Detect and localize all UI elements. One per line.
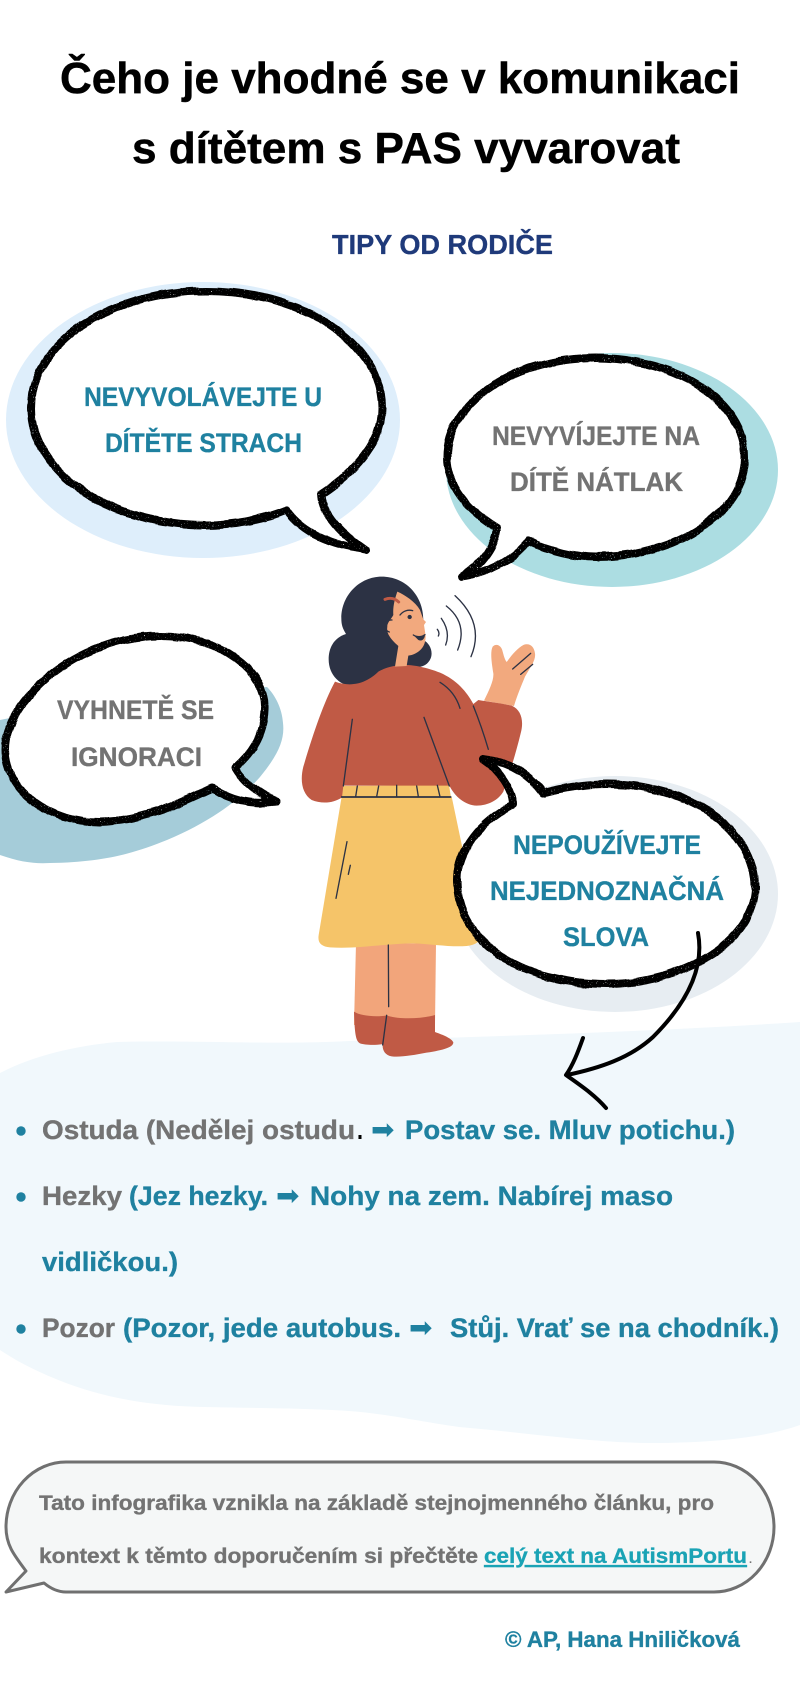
wave panel: [0, 1022, 800, 1443]
speech bubble: ambiguous words: [457, 759, 755, 984]
subtitle: TIPY OD RODIČE: [332, 228, 553, 260]
skirt: [318, 797, 481, 948]
item: Pozor: Pozor: [42, 1313, 115, 1343]
speech bubble: pressure: DÍTĚ NÁTLAK: [510, 466, 683, 497]
footer note bubble: celý text na AutismPortu: [484, 1545, 747, 1568]
sweater: [302, 665, 522, 806]
eye: [407, 615, 412, 619]
item: Pozor: (Pozor, jede autobus.: [123, 1313, 401, 1343]
speech bubble: ambiguous words: NEPOUŽÍVEJTE: [513, 829, 701, 860]
item: Hezky: (Jez hezky.: [129, 1181, 268, 1211]
speech bubble: fear: NEVYVOLÁVEJTE U: [84, 381, 322, 412]
item: Hezky: [16, 1179, 673, 1277]
item: Pozor: [16, 1311, 779, 1344]
speech bubble: pressure: NEVYVÍJEJTE NA: [492, 420, 700, 451]
speech bubble: pressure: [447, 358, 745, 577]
item: Pozor: Stůj. Vrať se na chodník.): [450, 1313, 779, 1343]
title: [60, 52, 740, 173]
hair clip: [385, 598, 399, 602]
bullet list: [16, 1113, 779, 1344]
mouth: [413, 635, 425, 641]
footer note bubble: [6, 1462, 774, 1592]
item: Ostuda: Ostuda (Nedělej ostudu: [42, 1115, 355, 1145]
item: Ostuda: [16, 1113, 735, 1146]
item: Hezky: vidličkou.): [42, 1247, 178, 1277]
speech bubble: fear: DÍTĚTE STRACH: [105, 427, 302, 458]
item: Pozor: ➡: [409, 1311, 432, 1344]
title: s dítětem s PAS vyvarovat: [132, 124, 680, 173]
item: Hezky: Hezky: [42, 1181, 122, 1211]
arrow to examples: [566, 933, 699, 1108]
speech bubble: ignoring: [5, 636, 277, 822]
face and clothing lines: [336, 596, 533, 1045]
speech bubble: ignoring: IGNORACI: [71, 742, 202, 772]
legs: [354, 943, 436, 1025]
right boot: [383, 1015, 453, 1057]
speech bubble: ambiguous words: NEJEDNOZNAČNÁ: [490, 875, 724, 906]
waistband: [342, 785, 451, 797]
footer note bubble: kontext k těmto doporučením si přečtěte: [39, 1545, 478, 1568]
footer note bubble: .: [749, 1554, 752, 1566]
item: Ostuda: ➡: [371, 1113, 394, 1146]
item: Hezky: Nohy na zem. Nabírej maso: [310, 1181, 673, 1211]
left boot: [354, 1012, 387, 1045]
blob: teal: [446, 353, 778, 587]
face: [387, 592, 426, 667]
copyright credit: © AP, Hana Hniličková: [505, 1627, 741, 1652]
footer note bubble: Tato infografika vznikla na základě stejnojmenného článku, pro: [39, 1492, 714, 1515]
illustration: woman speaking: [302, 577, 535, 1057]
speech bubble: ignoring: VYHNETĚ SE: [57, 694, 214, 725]
blob: pale grey: [452, 776, 778, 1012]
title: Čeho je vhodné se v komunikaci: [60, 52, 740, 103]
item: Ostuda: Postav se. Mluv potichu.): [405, 1115, 735, 1145]
hand: [484, 644, 535, 706]
item: Ostuda: .: [357, 1115, 363, 1145]
item: Hezky: ➡: [276, 1179, 299, 1212]
hair: [329, 577, 432, 687]
speech bubble: fear: [31, 291, 382, 550]
blob: light blue: [6, 282, 400, 558]
speech bubble: ambiguous words: SLOVA: [563, 922, 649, 952]
blob: steel blue: [0, 687, 283, 863]
